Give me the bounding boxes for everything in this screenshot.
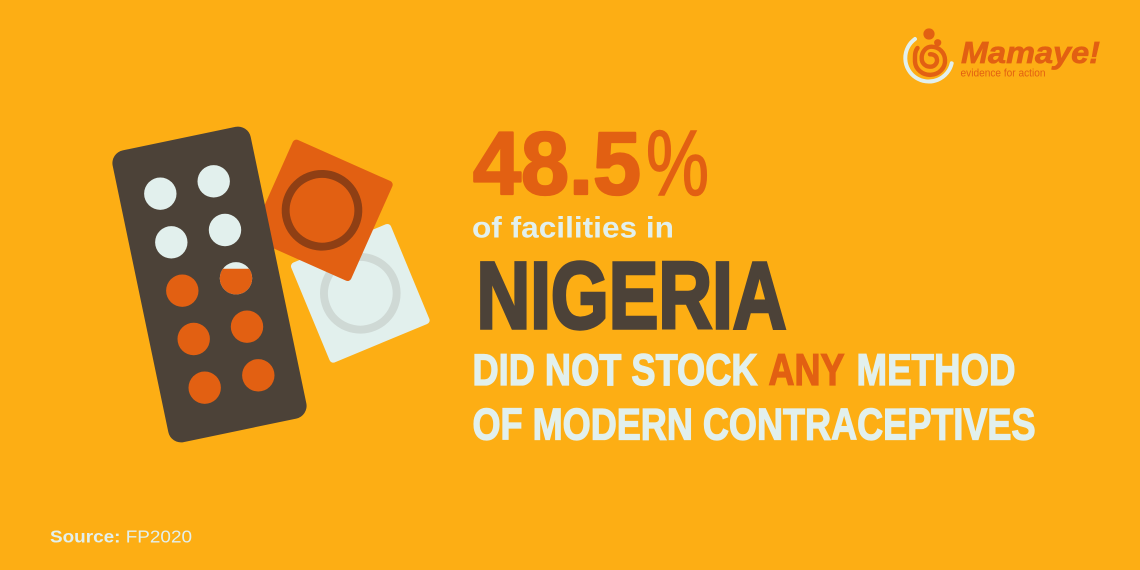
logo tagline: evidence for action [960, 68, 1046, 80]
logo spiral [915, 47, 945, 75]
source note: Source: FP2020 [50, 526, 192, 546]
icon: contraceptive pill pack [110, 124, 309, 445]
text: did not stock: DID NOT STOCK [472, 346, 758, 395]
half-used pill [220, 268, 252, 294]
logo large dot [923, 28, 935, 40]
wrapper square [250, 138, 394, 282]
logo small dot [934, 39, 941, 46]
icon: white condom wrapper [290, 223, 431, 364]
country name: Nigeria: NIGERIA [476, 243, 786, 349]
percent sign: % [646, 112, 709, 215]
headline statistic [473, 112, 709, 215]
wrapper square [290, 223, 431, 364]
text: of facilities in: of facilities in [472, 212, 674, 244]
wrapper ring [274, 162, 370, 258]
logo: Mamaye [905, 28, 1100, 82]
wrapper ring [313, 246, 408, 341]
statement line one [472, 346, 1016, 395]
icon: orange condom wrapper [250, 138, 394, 282]
number 48.5: 48.5 [473, 114, 641, 213]
text: any highlighted: ANY [768, 346, 844, 395]
pack body [110, 124, 309, 445]
logo ring [905, 39, 952, 82]
text: method: METHOD [856, 346, 1016, 395]
logo wordmark: Mamaye! [961, 35, 1100, 70]
orange pills [166, 274, 274, 404]
white pills [144, 165, 252, 294]
